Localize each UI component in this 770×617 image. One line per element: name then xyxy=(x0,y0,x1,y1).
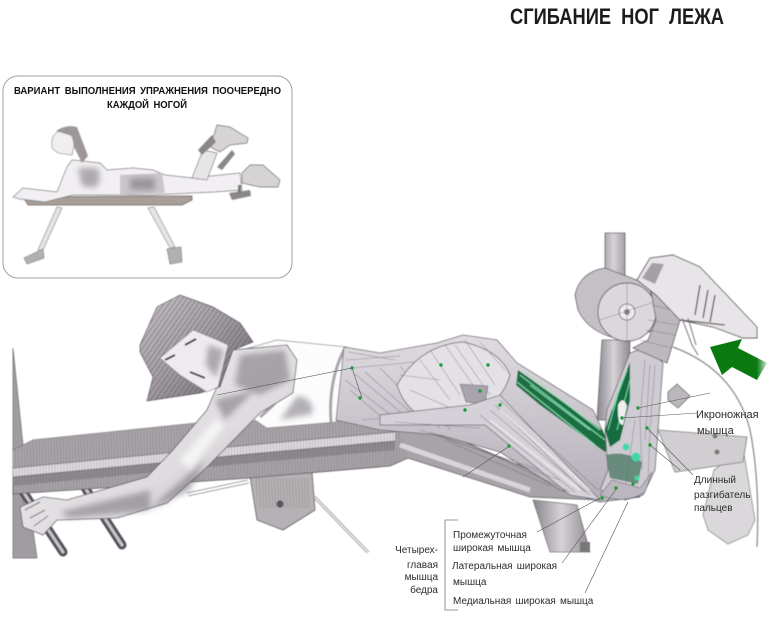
bench mount xyxy=(250,472,315,530)
head with hair xyxy=(140,295,253,401)
muscle marker dots xyxy=(350,363,652,500)
label: quadriceps: бедра xyxy=(410,584,438,596)
back muscles, glutes and thigh xyxy=(336,335,640,502)
machine post xyxy=(533,233,630,552)
label: long toe extensor: пальцев xyxy=(694,503,733,514)
torso and top xyxy=(235,340,347,428)
panel heading xyxy=(14,86,281,111)
label: vastus intermedius: Промежуточная xyxy=(453,530,527,541)
left bench post and rods xyxy=(13,348,369,558)
bench pad xyxy=(13,417,600,500)
arc frame and pad behind the leg xyxy=(658,347,758,547)
panel: single-leg variant xyxy=(3,76,292,278)
panel frame xyxy=(3,76,292,278)
label: long toe extensor: Длинный xyxy=(694,475,736,486)
arm and hand xyxy=(20,345,297,535)
label: quadriceps: главая xyxy=(407,560,438,571)
roller and sock xyxy=(575,268,680,363)
title: СГИБАНИЕ НОГ ЛЕЖА xyxy=(510,4,724,29)
label: quadriceps: мышца xyxy=(405,572,438,583)
small figure on bench xyxy=(13,125,280,264)
label: vastus lateralis: Латеральная широкая xyxy=(452,561,557,572)
label: vastus intermedius: широкая мышца xyxy=(453,543,531,554)
panel heading: ВАРИАНТ ВЫПОЛНЕНИЯ УПРАЖНЕНИЯ ПООЧЕРЕДНО xyxy=(14,86,281,97)
label: calf muscle: мышца xyxy=(697,425,735,437)
label: long toe extensor: разгибатель xyxy=(694,489,750,501)
label: vastus lateralis: мышца xyxy=(453,577,487,588)
label: quadriceps: Четырех- xyxy=(395,545,438,556)
bracket: quadriceps group xyxy=(445,520,458,610)
main illustration xyxy=(13,233,758,558)
label: vastus medialis: Медиальная широкая мышца xyxy=(453,596,594,607)
label: calf muscle: Икроножная xyxy=(696,409,759,421)
shoe xyxy=(637,255,757,355)
arrow: load direction xyxy=(710,339,767,380)
panel heading: КАЖДОЙ НОГОЙ xyxy=(107,98,187,111)
calf and gastrocnemius xyxy=(600,347,663,500)
leader lines xyxy=(217,368,710,593)
